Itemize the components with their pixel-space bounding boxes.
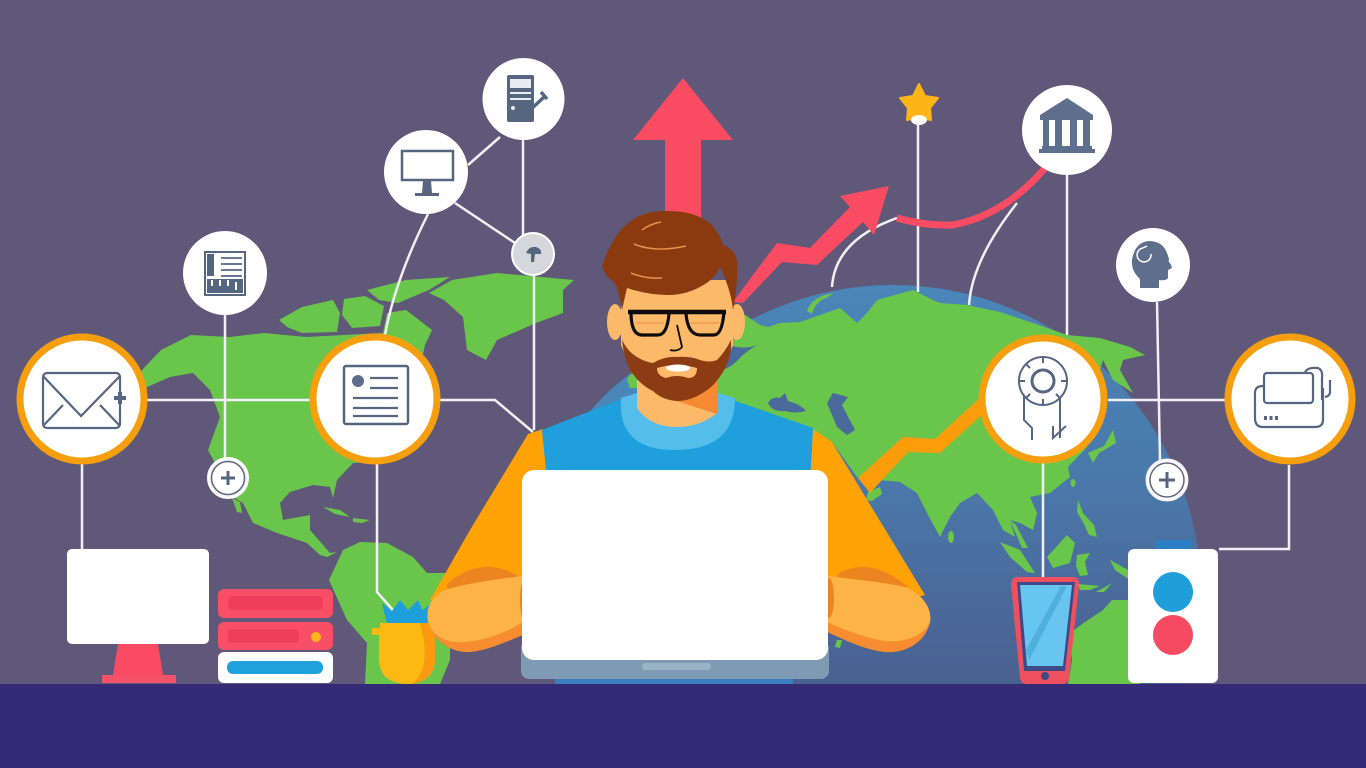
sleeve: left [430,429,552,625]
rising zigzag arrow [733,186,889,303]
circle: bank [1022,85,1112,175]
circle: gear [982,338,1104,460]
speaker panel [1128,540,1218,683]
laptop [521,470,829,684]
circle: small gray node [512,233,554,275]
landmass: blob beside neck [627,373,637,388]
landmass: Japan [1088,430,1116,463]
landmass: Sri Lanka [948,531,954,543]
landmass: Sumatra [1000,542,1035,573]
neck [637,380,717,427]
circle: document grid [183,231,267,315]
landmass: Arctic island north [367,277,450,303]
landmass: Arctic arc [807,293,834,314]
left ear [607,304,623,340]
face [621,280,733,398]
hair [602,211,737,310]
collar [621,392,735,450]
circle: profile document [313,337,437,461]
landmass: Sulawesi [1076,553,1090,576]
connector lines [82,125,1289,610]
circle: plus right [1146,460,1188,500]
potted plant [372,600,442,684]
landmass: Taiwan [1070,479,1076,487]
landmass: Cuba [323,507,350,517]
circle: envelope [20,337,144,461]
server stack [218,589,333,683]
star pin [900,84,938,125]
left forearm [428,567,526,652]
landmass: Borneo [1047,535,1075,568]
landmass: South America [329,542,450,684]
beard [622,340,731,401]
desk [0,684,1366,768]
shirt [542,399,813,480]
globe [585,285,1201,684]
right ear [729,304,745,340]
orange trend line [858,396,982,493]
landmass: Australia [1068,600,1140,684]
landmass: Arctic island centre [342,296,384,328]
landmass: Hispaniola [353,518,370,523]
inland seas [722,345,855,435]
landmass: Americas and Greenland [128,273,574,684]
landmass: North America [128,333,425,557]
sleeve: right [810,429,925,625]
circle: plus left [208,458,248,498]
landmass: Arctic island west [279,300,340,333]
desktop monitor [67,549,209,683]
red curve to bank [897,168,1045,225]
circle: cards [1228,337,1352,461]
landmass: Madagascar fragment [835,640,842,648]
person [428,211,930,652]
right forearm [824,567,930,652]
landmass: New Guinea [1110,560,1130,580]
circle: head [1116,228,1190,302]
landmass: Malay peninsula [1010,520,1028,548]
landmass: Africa fragment [866,487,882,501]
globe: left edge behind head [591,310,740,440]
circle: monitor [384,130,468,214]
landmass: Baja California [232,498,242,513]
landmass: Greenland [429,273,574,360]
landmass: Arctic island east [383,310,432,345]
smartphone [1011,577,1079,684]
glasses [628,312,726,351]
up arrow [633,78,733,230]
landmass: Philippines [1077,500,1097,537]
landmass: Eurasia [627,290,1145,684]
landmass: Java [1078,583,1112,592]
circle: server [482,58,564,140]
